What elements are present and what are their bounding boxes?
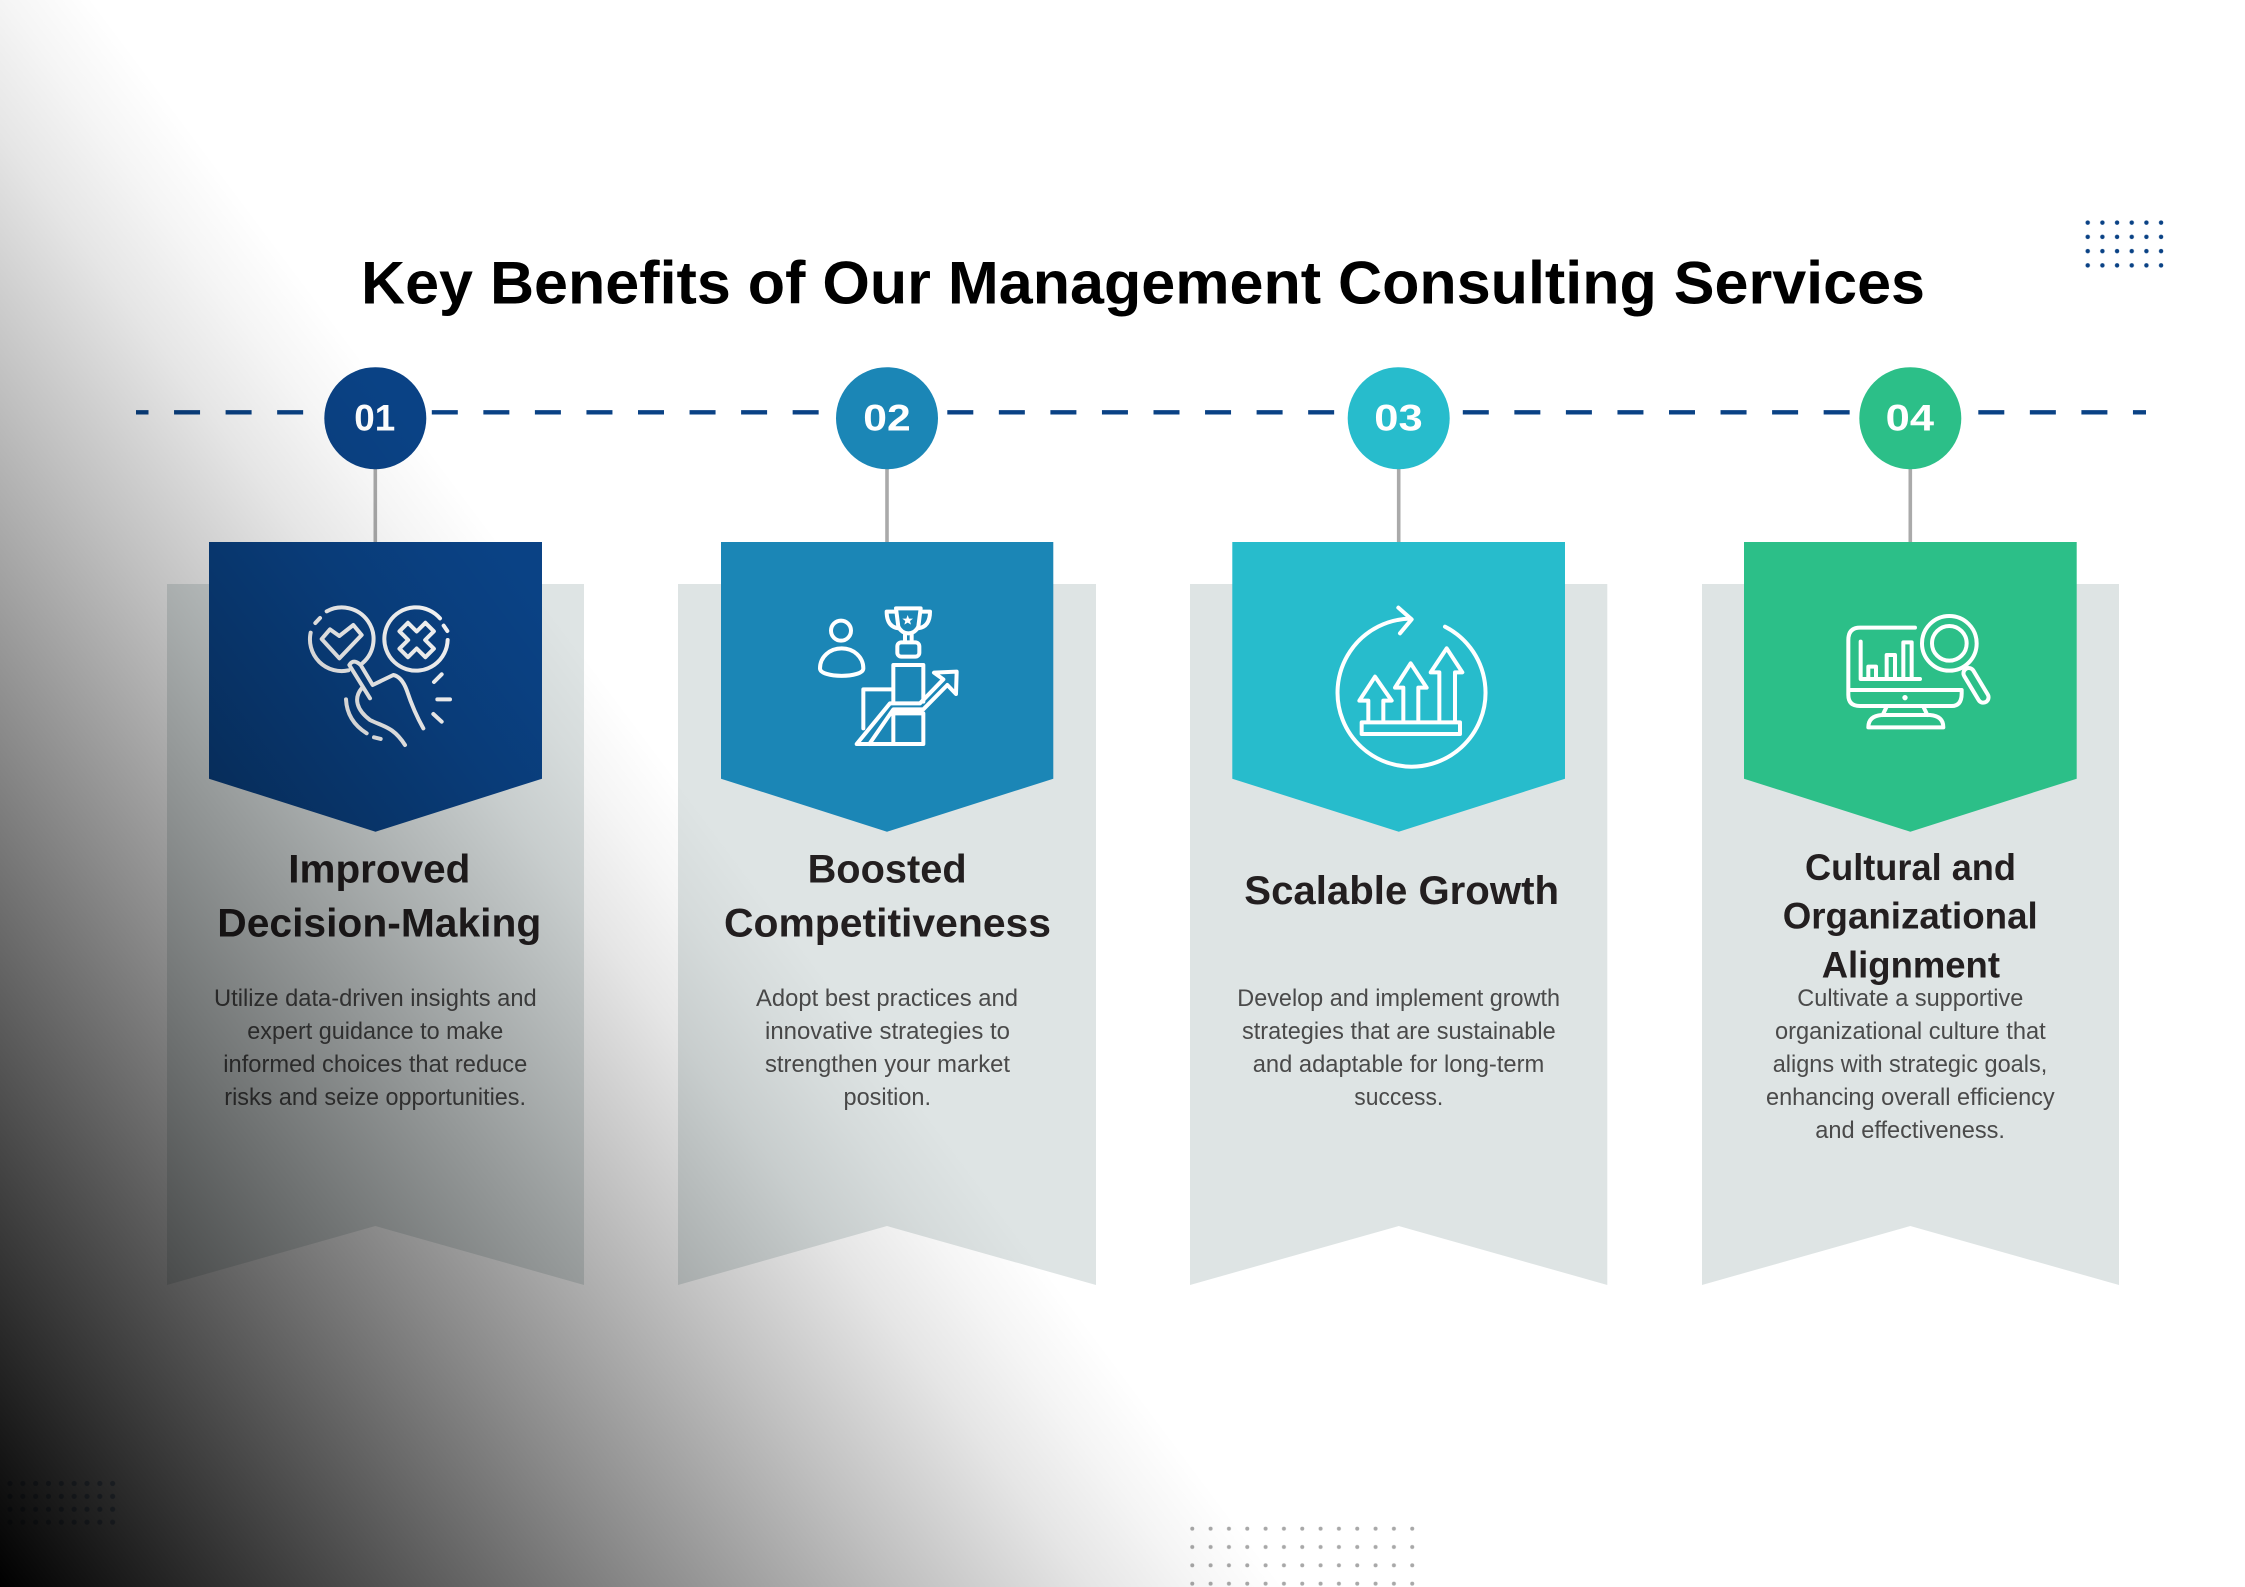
number badge 01: 01: [354, 398, 395, 438]
body text: position.: [844, 1084, 931, 1111]
body text: [1237, 985, 1560, 1111]
body text: organizational culture that: [1775, 1018, 2046, 1045]
number badge 02: 02: [863, 398, 911, 438]
body text: strengthen your market: [765, 1051, 1010, 1078]
icon: monitor chart and magnifier: [1848, 616, 1991, 727]
icon: growth arrows in cycle: [1338, 608, 1486, 767]
body text: expert guidance to make: [247, 1018, 503, 1045]
heading: Improved: [288, 848, 470, 892]
connector stem: [373, 469, 377, 542]
number badge 03: [1348, 367, 1450, 469]
banner: [1232, 542, 1565, 832]
body text: Utilize data-driven insights and: [214, 985, 537, 1012]
heading: [724, 848, 1051, 946]
heading: Scalable Growth: [1244, 869, 1559, 913]
body text: success.: [1354, 1084, 1443, 1111]
body text: [756, 985, 1018, 1111]
number badge 03: 03: [1374, 398, 1423, 438]
body text: [214, 985, 537, 1111]
body text: enhancing overall efficiency: [1766, 1084, 2055, 1111]
body text: Develop and implement growth: [1237, 985, 1560, 1012]
body text: and effectiveness.: [1815, 1117, 2005, 1144]
body text: Cultivate a supportive: [1797, 985, 2023, 1012]
card background: [678, 584, 1096, 1285]
body text: and adaptable for long-term: [1253, 1051, 1544, 1078]
body text: informed choices that reduce: [223, 1051, 527, 1078]
heading: Organizational: [1783, 894, 2038, 936]
connector stem: [885, 469, 889, 542]
body text: [1766, 985, 2055, 1144]
banner: [721, 542, 1053, 832]
connector stem: [1909, 469, 1912, 542]
body text: strategies that are sustainable: [1242, 1018, 1556, 1045]
body text: aligns with strategic goals,: [1773, 1051, 2047, 1078]
body text: Adopt best practices and: [756, 985, 1018, 1012]
title: Key Benefits of Our Management Consulting Services: [361, 250, 1925, 316]
decorative dots: bottom centre: [1183, 1520, 1421, 1587]
decorative dots: top right: [2080, 216, 2168, 272]
card background: [1702, 584, 2119, 1285]
card background: [1190, 584, 1607, 1285]
heading: Alignment: [1822, 944, 2000, 986]
heading: Competitiveness: [724, 902, 1051, 946]
heading: Cultural and: [1805, 846, 2016, 888]
panel: card 03 scalable growth: [1190, 367, 1607, 1285]
number badge 04: 04: [1886, 398, 1934, 438]
connector stem: [1397, 469, 1400, 542]
body text: risks and seize opportunities.: [224, 1084, 526, 1111]
number badge 04: [1859, 367, 1961, 469]
decorative dots: bottom left: [4, 1477, 119, 1529]
icon: hand choosing check or cross: [310, 607, 450, 745]
body text: innovative strategies to: [765, 1018, 1010, 1045]
heading: Decision-Making: [217, 902, 541, 946]
panel: card 04 cultural and organizational alignment: [1702, 367, 2119, 1285]
number badge 01: [324, 367, 426, 469]
icon: person, trophy and podium: [820, 608, 957, 744]
heading: [1783, 846, 2038, 986]
heading: [217, 848, 541, 946]
number badge 02: [836, 367, 938, 469]
banner: [1744, 542, 2077, 832]
panel: card 02 boosted competitiveness: [678, 367, 1096, 1285]
panel: card 01 improved decision-making: [167, 367, 584, 1285]
card background: [167, 584, 584, 1285]
heading: Boosted: [808, 848, 967, 892]
dashed timeline: [136, 410, 2146, 414]
banner: [209, 542, 542, 832]
